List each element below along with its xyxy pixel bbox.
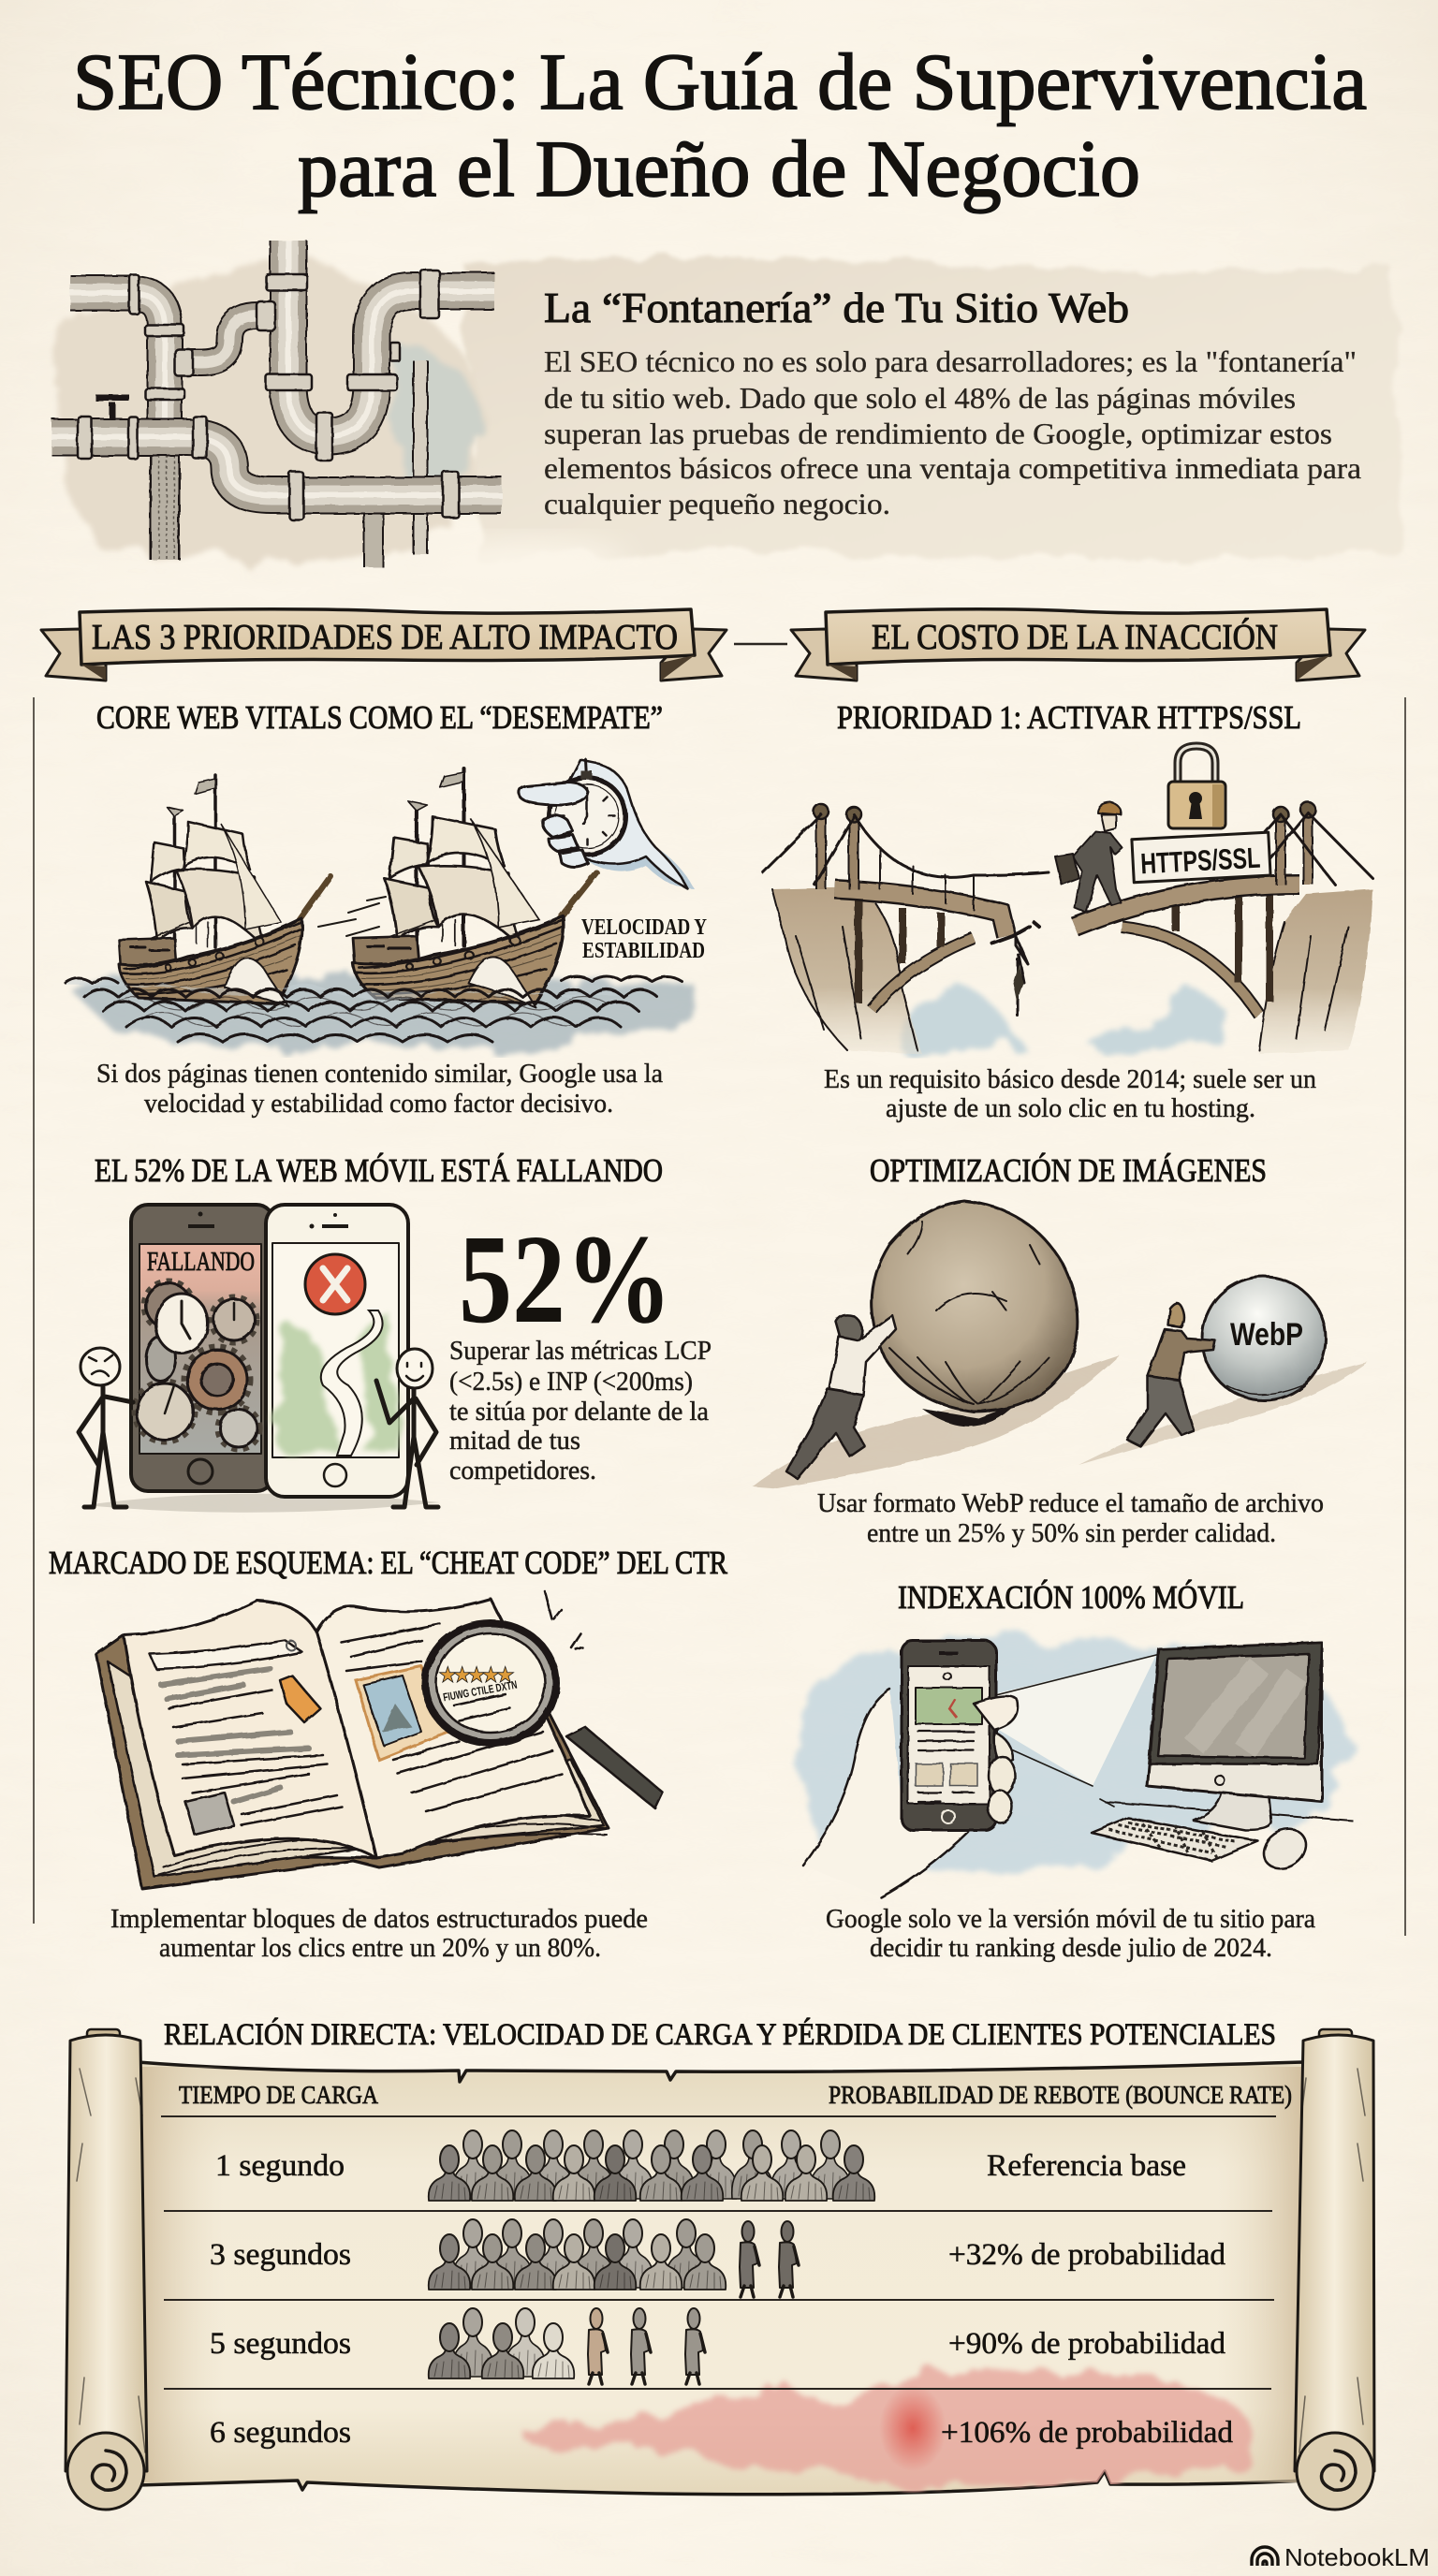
dark phone: [131, 1205, 273, 1491]
banner: el costo de la inacción: [791, 609, 1365, 681]
row: 1 segundo: Referencia base: [987, 2149, 1186, 2183]
illustration: boulder vs webp ball: [753, 1201, 1368, 1488]
table header: TIEMPO DE CARGA: [179, 2081, 378, 2109]
row: 6 segundos: 6 segundos: [210, 2416, 351, 2450]
caption: [826, 1905, 1315, 1963]
row: 6 segundos: [210, 2416, 1233, 2450]
rating stars in magnifier: ★★★★★: [438, 1663, 515, 1688]
crowd shrinking: [429, 2219, 799, 2297]
banner: las 3 prioridades de alto impacto: LAS 3 PRIORIDADES DE ALTO IMPACTO: [92, 618, 678, 657]
row: 6 segundos: +106% de probabilidad: [941, 2416, 1233, 2450]
stat description: competidores.: [449, 1456, 596, 1486]
label: velocidad y estabilidad: ESTABILIDAD: [582, 939, 705, 963]
illustration: boulder vs webp ball: WebP: [1230, 1317, 1303, 1353]
heading: INDEXACIÓN 100% MÓVIL: [898, 1578, 1244, 1616]
rating stars in magnifier: FIUWG CTILE DXTN: [442, 1678, 518, 1704]
red stain: [524, 2366, 1244, 2490]
panel: core web vitals: [66, 699, 707, 1119]
panel: indexación 100% móvil: [800, 1578, 1353, 1963]
figure: happy stick man: [376, 1349, 438, 1507]
hand holding phone: [803, 1641, 1018, 1897]
label: velocidad y estabilidad: VELOCIDAD Y: [581, 915, 707, 940]
caption: entre un 25% y 50% sin perder calidad.: [867, 1519, 1276, 1548]
caption: [96, 1060, 663, 1119]
caption: Implementar bloques de datos estructurados puede: [110, 1905, 648, 1934]
stat: 52%: 52%: [459, 1209, 672, 1350]
row: 3 segundos: 3 segundos: [210, 2238, 351, 2272]
panel: 52% de la web móvil: [79, 1151, 712, 1513]
banner: el costo de la inacción: EL COSTO DE LA INACCIÓN: [872, 618, 1278, 657]
heading: EL 52% DE LA WEB MÓVIL ESTÁ FALLANDO: [95, 1151, 663, 1189]
stat description: mitad de tus: [449, 1427, 580, 1456]
illustration: pipes: [51, 241, 502, 567]
stat description: (<2.5s) e INP (<200ms): [449, 1368, 693, 1397]
table header: [179, 2081, 1292, 2109]
heading: MARCADO DE ESQUEMA: EL “CHEAT CODE” DEL CTR: [49, 1544, 728, 1581]
panel: marcado de esquema: [49, 1544, 728, 1963]
panel: prioridad 1 https: [763, 699, 1372, 1123]
stat description: Superar las métricas LCP: [449, 1337, 712, 1366]
caption: Si dos páginas tienen contenido similar, Google usa la: [96, 1060, 663, 1089]
illustration: broken bridge: [763, 746, 1372, 1054]
panel body text: superan las pruebas de rendimiento de Google, optimizar estos: [544, 417, 1332, 450]
monitor: [1092, 1643, 1353, 1876]
illustration: open book with magnifier: [96, 1591, 663, 1889]
panel: la fontanería de tu sitio web: [51, 241, 1402, 582]
table header: PROBABILIDAD DE REBOTE (BOUNCE RATE): [829, 2081, 1292, 2109]
caption: decidir tu ranking desde julio de 2024.: [870, 1934, 1272, 1963]
illustration: two phones: [79, 1205, 440, 1513]
man pushing boulder: [786, 1315, 896, 1479]
row: 3 segundos: +32% de probabilidad: [948, 2238, 1225, 2272]
panel body text: El SEO técnico no es solo para desarrolladores; es la "fontanería": [544, 344, 1357, 378]
icon: hand holding stopwatch: [520, 760, 695, 889]
row: 1 segundo: [215, 2130, 1186, 2201]
row: 5 segundos: [210, 2308, 1225, 2384]
torn paper background: [463, 257, 1402, 562]
panel body text: cualquier pequeño negocio.: [544, 487, 890, 520]
caption: [817, 1489, 1324, 1548]
caption: Usar formato WebP reduce el tamaño de archivo: [817, 1489, 1324, 1518]
panel body text: [544, 344, 1361, 520]
row: 3 segundos: [210, 2219, 1225, 2297]
man walking across: [1055, 802, 1122, 913]
left roller: [66, 2029, 147, 2510]
heading: PRIORIDAD 1: ACTIVAR HTTPS/SSL: [837, 699, 1301, 736]
panel body text: elementos básicos ofrece una ventaja competitiva inmediata para: [544, 451, 1361, 485]
caption: [824, 1065, 1316, 1123]
sign: https/ssl: [1132, 832, 1270, 883]
illustration: phone and desktop: [800, 1637, 1353, 1897]
caption: velocidad y estabilidad como factor decisivo.: [144, 1090, 613, 1119]
stat description: te sitúa por delante de la: [449, 1398, 709, 1427]
figure: frustrated stick man: [79, 1348, 133, 1507]
heading: RELACIÓN DIRECTA: VELOCIDAD DE CARGA Y PÉRDIDA DE CLIENTES POTENCIALES: [164, 2016, 1276, 2052]
heading: OPTIMIZACIÓN DE IMÁGENES: [870, 1151, 1267, 1189]
rating stars in magnifier: [438, 1663, 518, 1704]
panel body text: de tu sitio web. Dado que solo el 48% de las páginas móviles: [544, 381, 1296, 415]
panel: optimización de imágenes: [753, 1151, 1368, 1548]
panel: relación directa scroll table: [66, 2016, 1374, 2510]
heading: CORE WEB VITALS COMO EL “DESEMPATE”: [96, 699, 663, 736]
title: [73, 37, 1367, 213]
icon: padlock: [1168, 746, 1225, 828]
crowd leaving: [429, 2308, 705, 2384]
light phone with red x: [266, 1205, 408, 1497]
title: para el Dueño de Negocio: [298, 124, 1140, 213]
notebooklm logo: NotebookLM: [1284, 2543, 1430, 2571]
scroll parchment: [66, 2029, 1374, 2510]
caption: [110, 1905, 648, 1963]
banner: las 3 prioridades de alto impacto: [41, 609, 726, 681]
row: 5 segundos: +90% de probabilidad: [948, 2327, 1225, 2361]
crowd full: [429, 2130, 874, 2201]
row: 5 segundos: 5 segundos: [210, 2327, 351, 2361]
right roller: [1295, 2029, 1374, 2510]
man pushing webp ball: [1127, 1303, 1215, 1446]
caption: aumentar los clics entre un 20% y un 80%.: [159, 1934, 601, 1963]
caption: Google solo ve la versión móvil de tu sitio para: [826, 1905, 1315, 1934]
title: SEO Técnico: La Guía de Supervivencia: [73, 37, 1367, 126]
dark phone: FALLANDO: [147, 1248, 255, 1277]
stat description: [449, 1337, 712, 1486]
panel heading: La “Fontanería” de Tu Sitio Web: [544, 285, 1129, 331]
label: velocidad y estabilidad: [581, 915, 707, 963]
row: 1 segundo: 1 segundo: [215, 2149, 345, 2183]
sign: https/ssl: HTTPS/SSL: [1139, 842, 1261, 880]
illustration: racing ships with stopwatch: [66, 768, 695, 1046]
caption: ajuste de un solo clic en tu hosting.: [886, 1094, 1255, 1123]
caption: Es un requisito básico desde 2014; suele ser un: [824, 1065, 1316, 1094]
